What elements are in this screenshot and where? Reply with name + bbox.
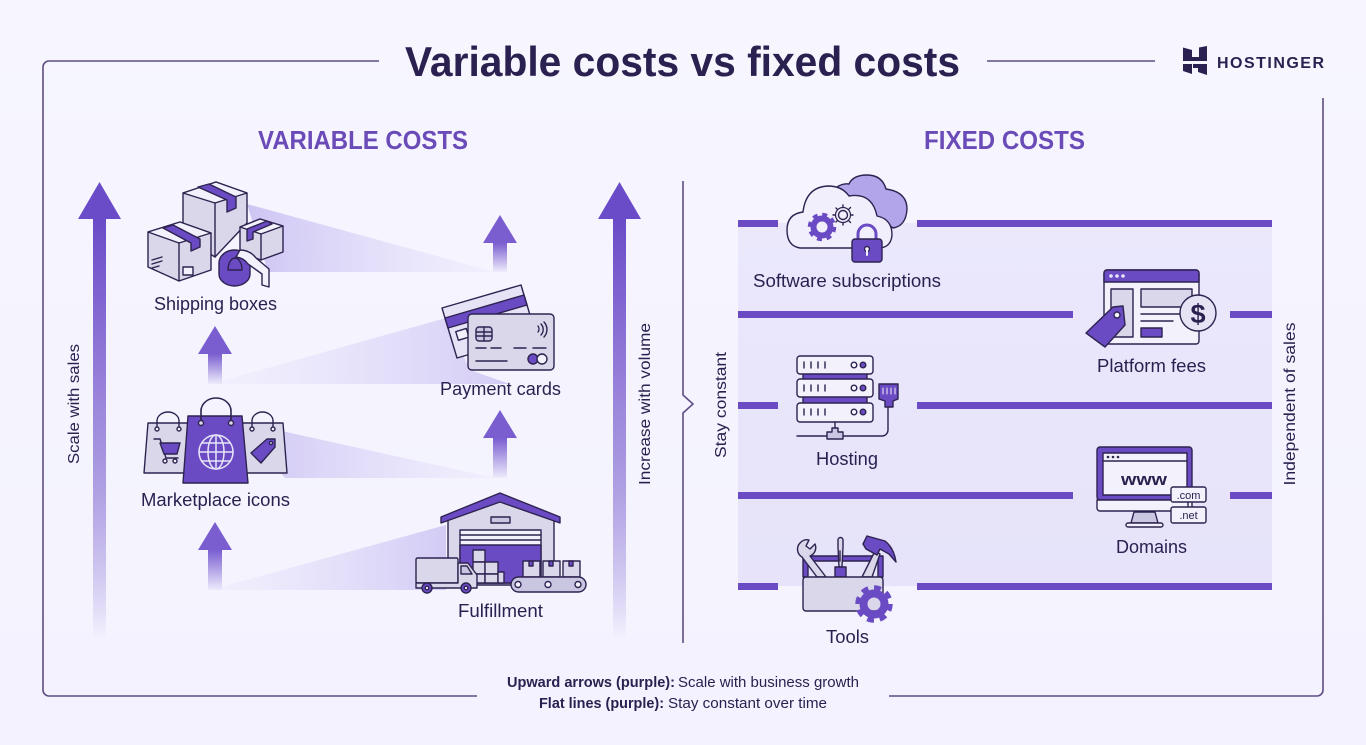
label: shipping boxes: Shipping boxes	[154, 294, 277, 314]
icon text: .net: .net	[1179, 510, 1198, 522]
label: marketplace icons: Marketplace icons	[141, 490, 290, 510]
outer frame	[43, 61, 1323, 696]
logo: Hostinger: HOSTINGER	[1217, 55, 1324, 72]
legend	[507, 675, 859, 712]
beam: shipping boxes	[247, 204, 495, 272]
icon text: dollar: $	[1190, 299, 1206, 329]
arrow: small up 1	[483, 215, 517, 272]
beam: payment cards	[210, 318, 510, 384]
flat lines	[738, 220, 1272, 590]
heading: variable costs: VARIABLE COSTS	[258, 125, 468, 155]
legend line 1: Scale with business growth	[678, 675, 859, 691]
label: platform fees: Platform fees	[1097, 356, 1206, 376]
icon: warehouse	[416, 493, 586, 593]
band background	[738, 223, 1272, 586]
legend line 2	[539, 696, 827, 712]
legend line 2: Stay constant over time	[668, 696, 827, 712]
label: scale with sales: Scale with sales	[66, 344, 83, 464]
beam: marketplace	[232, 420, 495, 478]
icon: domains	[1097, 447, 1206, 527]
icon: platform fees	[1086, 270, 1216, 347]
panel: variable costs diagram	[66, 182, 654, 640]
label: independent of sales: Independent of sales	[1282, 322, 1299, 486]
label: software subscriptions: Software subscriptions	[753, 271, 941, 291]
label: hosting: Hosting	[816, 449, 878, 469]
label: fulfillment: Fulfillment	[458, 601, 543, 621]
arrow: small up 4	[198, 522, 232, 590]
legend line 1: Upward arrows (purple):	[507, 675, 675, 691]
label: tools: Tools	[826, 627, 869, 647]
logo: Hostinger	[1183, 46, 1324, 75]
label: stay constant: Stay constant	[713, 351, 730, 458]
icon: shipping boxes	[148, 182, 283, 287]
icon: server	[797, 356, 898, 439]
icon text: www: www	[1120, 470, 1168, 489]
icon text: .com: .com	[1177, 490, 1200, 502]
arrow: small up 2	[198, 326, 232, 384]
icon: cloud lock	[787, 175, 907, 262]
legend line 1	[507, 675, 859, 691]
label: payment cards: Payment cards	[440, 379, 561, 399]
arrow: scale with sales	[78, 182, 121, 640]
divider with notch	[683, 181, 693, 643]
legend line 2: Flat lines (purple):	[539, 696, 664, 712]
heading: fixed costs: FIXED COSTS	[924, 125, 1085, 155]
title: Variable costs vs fixed costs	[405, 38, 960, 85]
icon: tools	[798, 536, 896, 620]
icon: marketplace bags	[144, 398, 287, 483]
label: increase with volume: Increase with volume	[637, 323, 654, 485]
beam: fulfillment	[210, 525, 446, 590]
icon: payment cards	[442, 285, 554, 370]
arrow: increase with volume	[598, 182, 641, 640]
arrow: small up 3	[483, 410, 517, 478]
panel: fixed costs diagram	[713, 175, 1299, 647]
label: domains: Domains	[1116, 537, 1187, 557]
